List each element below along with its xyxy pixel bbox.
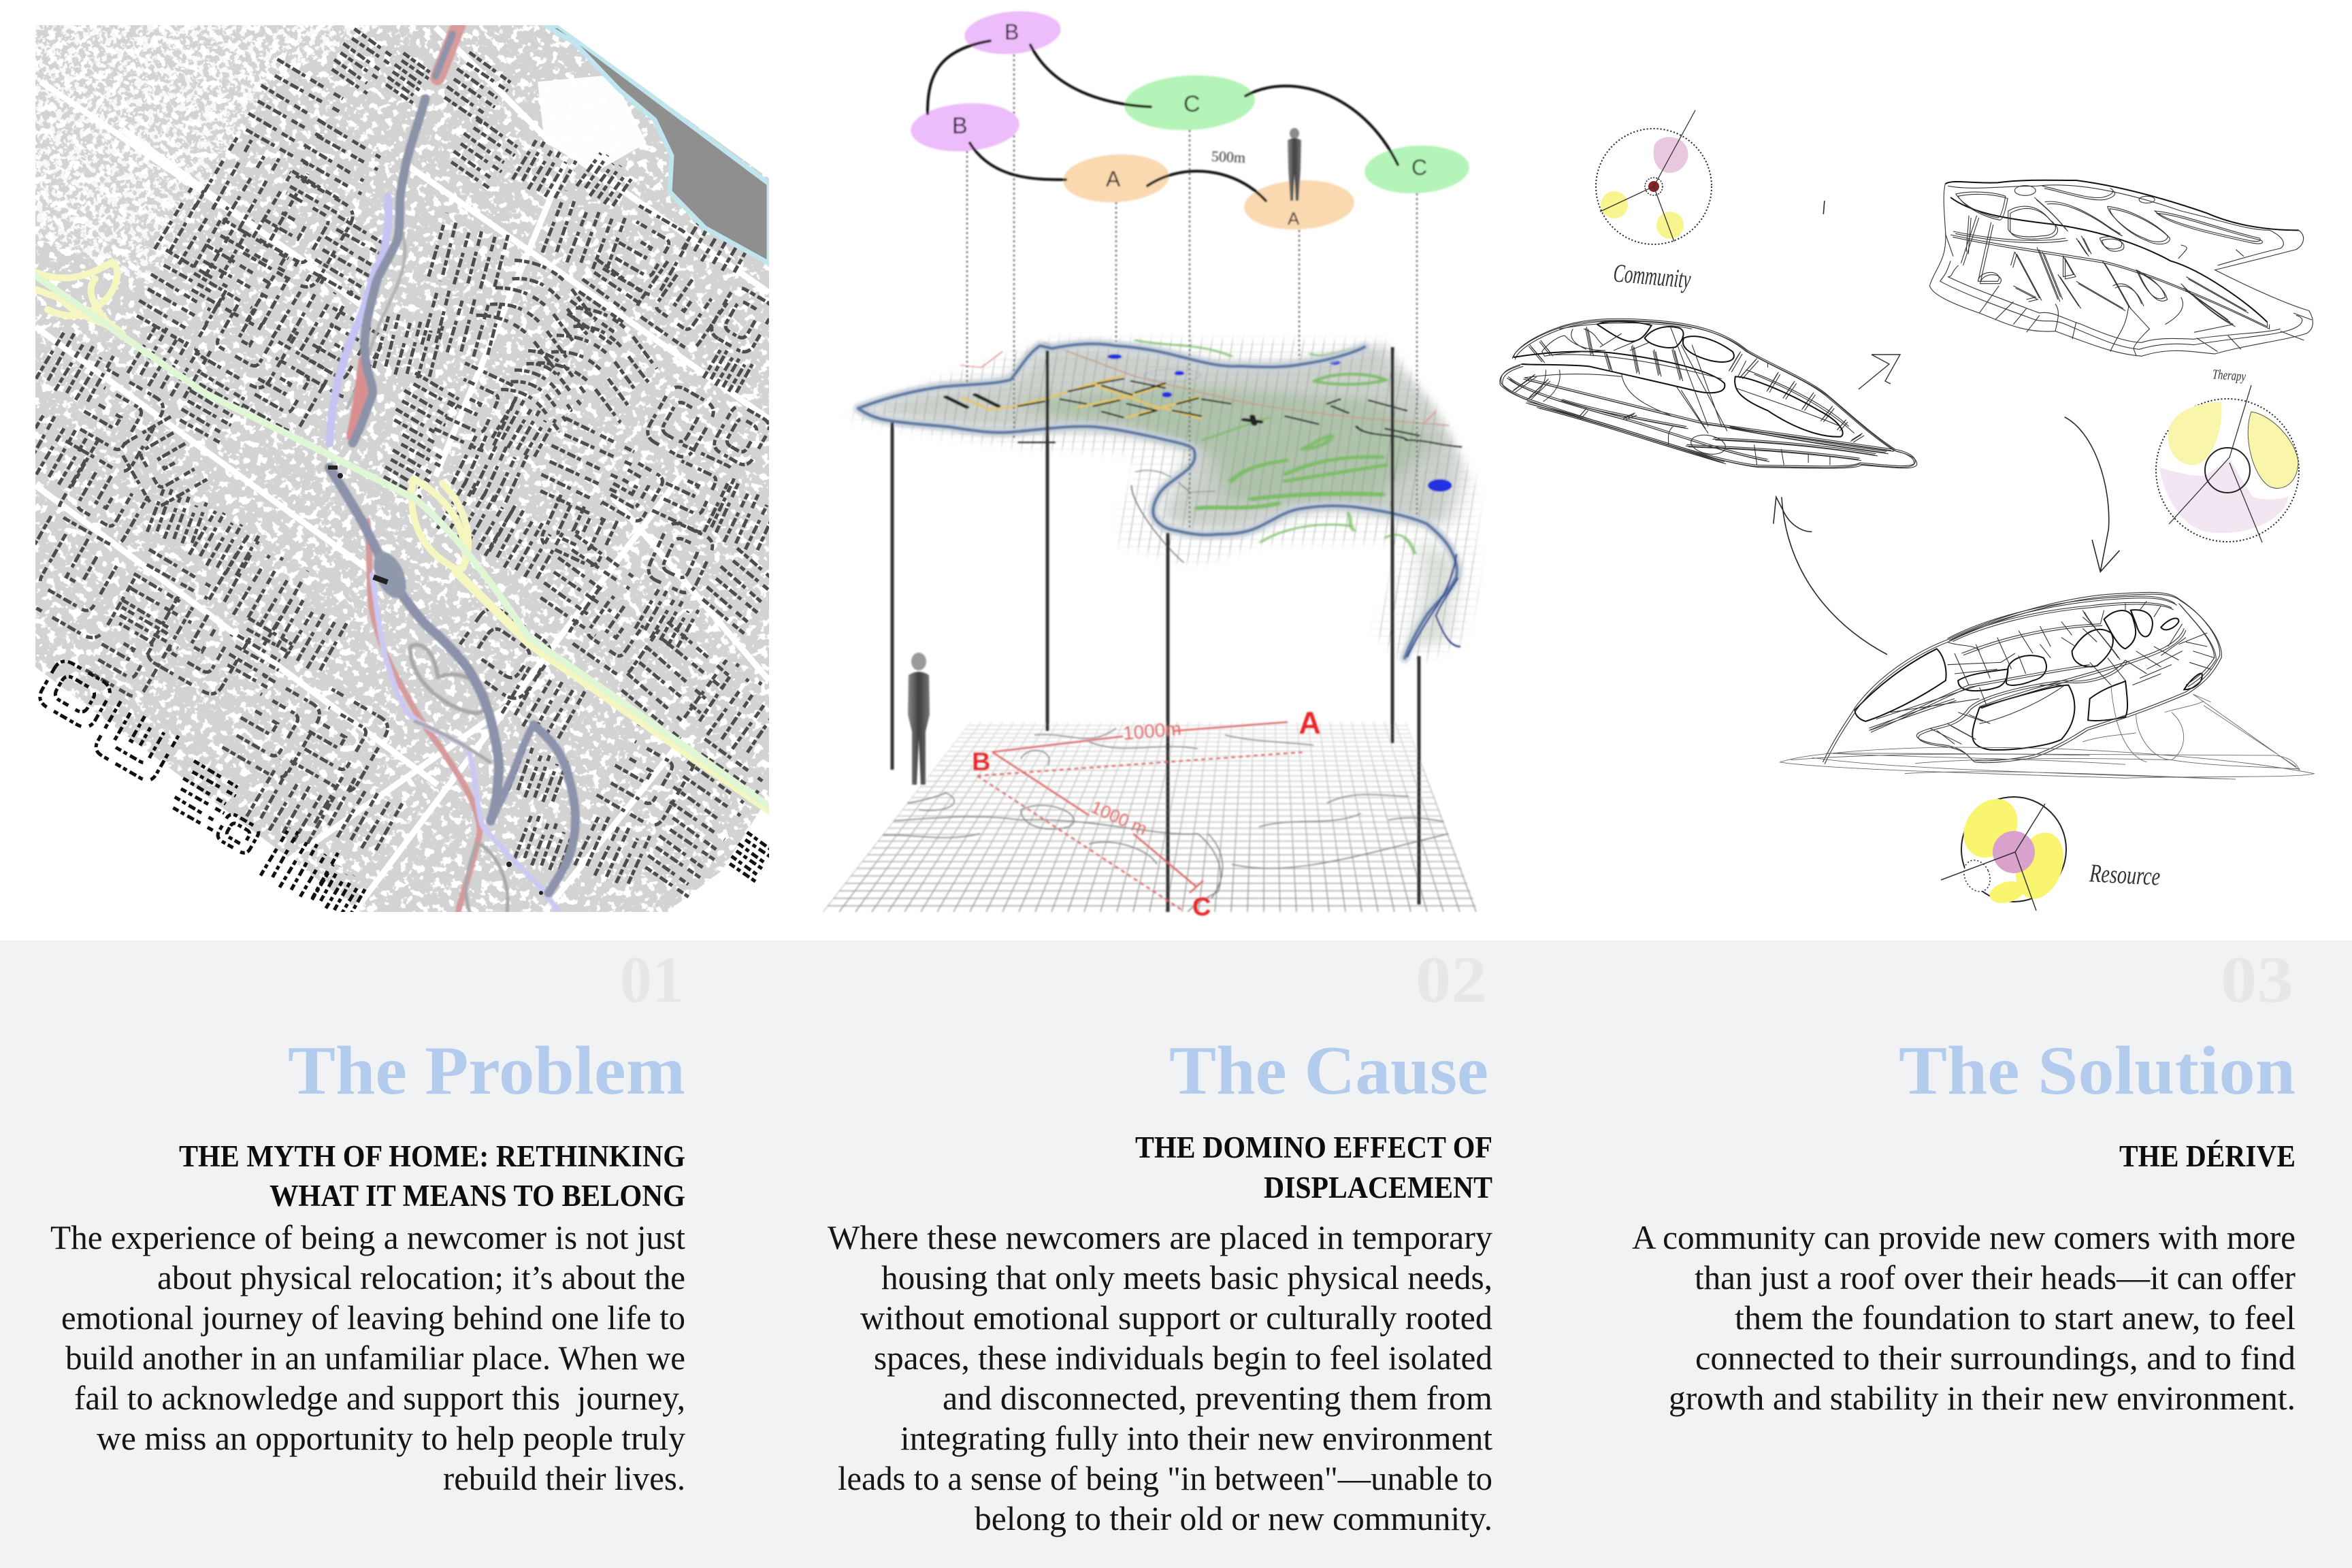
diagram: therapy circle [2156,385,2299,542]
body text: solution: them the foundation to start anew, to feel [1735,1298,2296,1337]
red distance triangle: B [972,748,990,777]
arrows: cycle between the three forms [1774,201,2119,655]
floating map: green vegetation strokes, roads and town blocks [946,340,1460,563]
body text: cause: leads to a sense of being "in between"—unable to [838,1459,1492,1497]
small standing figure on bubble [1288,128,1301,201]
red distance triangle: 1000 m [1088,796,1150,839]
number 03: 03 [2221,943,2293,1017]
subheading: the domino effect [1135,1130,1492,1205]
network bubbles and connectors: C [1183,91,1200,117]
body text: problem: we miss an opportunity to help people truly [97,1419,685,1457]
subheading: the derive: THE DÉRIVE [2119,1139,2296,1173]
label: Therapy: Therapy [2212,367,2247,385]
diagram: community circle [1596,110,1712,244]
column: The Problem [50,943,685,1497]
body text: solution: A community can provide new comers with more [1632,1218,2296,1256]
body text: solution: than just a roof over their heads—it can offer [1695,1258,2296,1296]
network bubbles and connectors: A [1288,208,1300,229]
number 01: 01 [620,943,684,1017]
body text: cause: spaces, these individuals begin to feel isolated [874,1339,1492,1377]
panel: map of the problem [7,25,787,921]
subheading: the myth of home [179,1139,685,1213]
body text: solution: connected to their surroundings, and to find [1695,1339,2296,1377]
dotted projection lines [967,54,1417,527]
body text: solution [1632,1218,2296,1417]
body text: problem: fail to acknowledge and support this journey, [74,1379,685,1417]
body text: problem [50,1218,685,1497]
heading: The Cause: The Cause [1169,1032,1488,1109]
network bubbles and connectors [909,7,1471,232]
subheading: the domino effect: THE DOMINO EFFECT OF [1135,1130,1492,1164]
body text: problem: about physical relocation; it’s about the [157,1258,685,1296]
panel: diagram of the cause [817,7,1490,921]
network bubbles and connectors: B [1004,20,1019,44]
network bubbles and connectors: A [1106,167,1121,191]
body text: problem: build another in an unfamiliar place. When we [65,1339,685,1377]
network bubbles and connectors: 500m [1211,148,1246,166]
subheading: the myth of home: WHAT IT MEANS TO BELONG [270,1179,685,1213]
body text: problem: The experience of being a newcomer is not just [50,1218,685,1256]
panel: design solution sketches [1500,110,2314,911]
label: Resource: Resource [2088,859,2161,892]
body text: cause: housing that only meets basic physical needs, [881,1258,1492,1296]
body text: cause [828,1218,1492,1537]
network bubbles and connectors: B [952,113,968,139]
heading: The Solution: The Solution [1899,1032,2296,1109]
subheading: the domino effect: DISPLACEMENT [1264,1171,1492,1205]
map: suburban street rows of houses [7,29,787,898]
sketch: resource wireframe form on ground [1780,592,2314,779]
column: The Solution [1632,943,2296,1417]
body text: problem: rebuild their lives. [443,1459,685,1497]
diagram: resource circle [1941,789,2072,911]
ground plane with perspective grid [817,722,1484,912]
map: highway in green and yellow interchanges [35,262,769,810]
body text: cause: Where these newcomers are placed in temporary [828,1218,1492,1256]
support poles linking map and ground [892,347,1419,912]
number 02: 02 [1416,943,1487,1017]
sketch: therapy wireframe form [1929,180,2313,356]
red distance triangle: C [1192,893,1211,921]
label: Community: Community [1612,259,1692,294]
arrow: from community form towards therapy form [1859,355,1900,389]
heading: The Problem: The Problem [288,1032,685,1109]
column: The Cause [828,943,1492,1537]
sketch: community wireframe form [1500,318,1917,468]
body text: cause: integrating fully into their new environment [900,1419,1492,1457]
map: dark water body in the corner [546,26,769,263]
network bubbles and connectors: C [1411,155,1427,180]
red distance triangle: A [1298,705,1321,740]
map: black houses along the southwest edge [35,657,778,921]
large standing figure [908,653,930,785]
body text: cause: and disconnected, preventing them from [943,1379,1492,1417]
text band background [0,941,2352,1568]
floating map: river outline [858,344,1460,658]
red distance triangle: 1000m [1122,718,1182,744]
body text: cause: belong to their old or new community. [975,1499,1492,1537]
body text: solution: growth and stability in their new environment. [1669,1379,2296,1417]
floating map: shaded terrain with grid [830,327,1490,674]
map: braided river channels [329,26,575,912]
body text: cause: without emotional support or culturally rooted [860,1298,1492,1337]
subheading: the myth of home: THE MYTH OF HOME: RETHINKING [179,1139,685,1173]
red distance triangle [972,705,1321,921]
map ground: speckled gray land [35,25,770,913]
body text: problem: emotional journey of leaving behind one life to [61,1298,685,1337]
map: small dark markers on the river [328,466,543,895]
